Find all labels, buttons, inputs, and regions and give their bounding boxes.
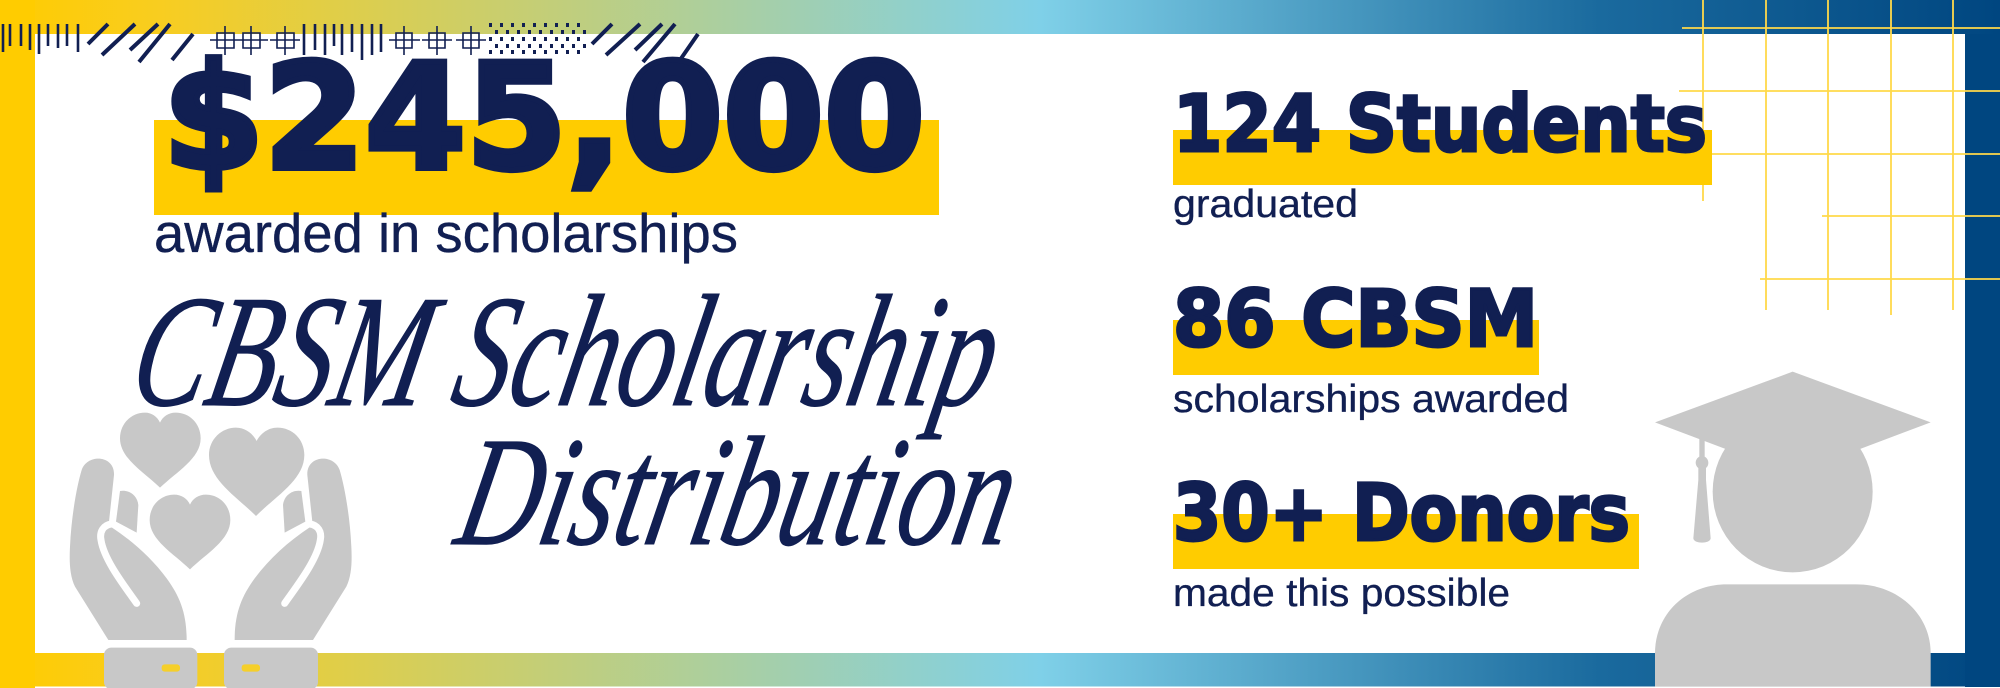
highlight bar: total bbox=[154, 120, 939, 215]
title: CBSM Scholarship Distribution: CBSM Scholarship bbox=[119, 263, 1016, 440]
top pattern strip bbox=[3, 24, 698, 62]
caption: made this possible bbox=[1173, 572, 1510, 615]
grid decoration bbox=[1679, 0, 2000, 315]
number: 30+ Donors bbox=[1173, 469, 1630, 559]
caption: awarded in scholarships: awarded in scholarships bbox=[154, 202, 738, 264]
stat: 124 Students bbox=[1173, 80, 1712, 226]
icon: hands holding hearts bbox=[70, 413, 352, 688]
stat: 30+ Donors bbox=[1173, 469, 1639, 615]
panel: total awarded bbox=[154, 33, 939, 264]
head bbox=[1713, 411, 1873, 572]
number: 86 CBSM bbox=[1173, 275, 1538, 365]
cuffs bbox=[104, 648, 318, 688]
stat: 86 CBSM bbox=[1173, 275, 1569, 421]
title: CBSM Scholarship Distribution: Distribution bbox=[443, 406, 1033, 579]
caption: scholarships awarded bbox=[1173, 378, 1569, 421]
big number: $245,000: $245,000 bbox=[163, 33, 925, 203]
heart 3 bbox=[150, 495, 230, 569]
right hand bbox=[235, 459, 352, 640]
highlight bar bbox=[1173, 514, 1639, 569]
icon: graduate bbox=[1655, 372, 1931, 687]
mortarboard bbox=[1655, 372, 1931, 449]
highlight bar bbox=[1173, 320, 1539, 375]
title: CBSM Scholarship Distribution bbox=[119, 263, 1033, 579]
caption: graduated bbox=[1173, 183, 1358, 226]
left hand bbox=[70, 459, 187, 640]
body bbox=[1655, 584, 1931, 687]
heart 1 bbox=[120, 413, 201, 488]
number: 124 Students bbox=[1173, 80, 1707, 170]
tassel bbox=[1693, 437, 1711, 543]
heart 2 bbox=[209, 428, 304, 516]
highlight bar bbox=[1173, 130, 1712, 185]
